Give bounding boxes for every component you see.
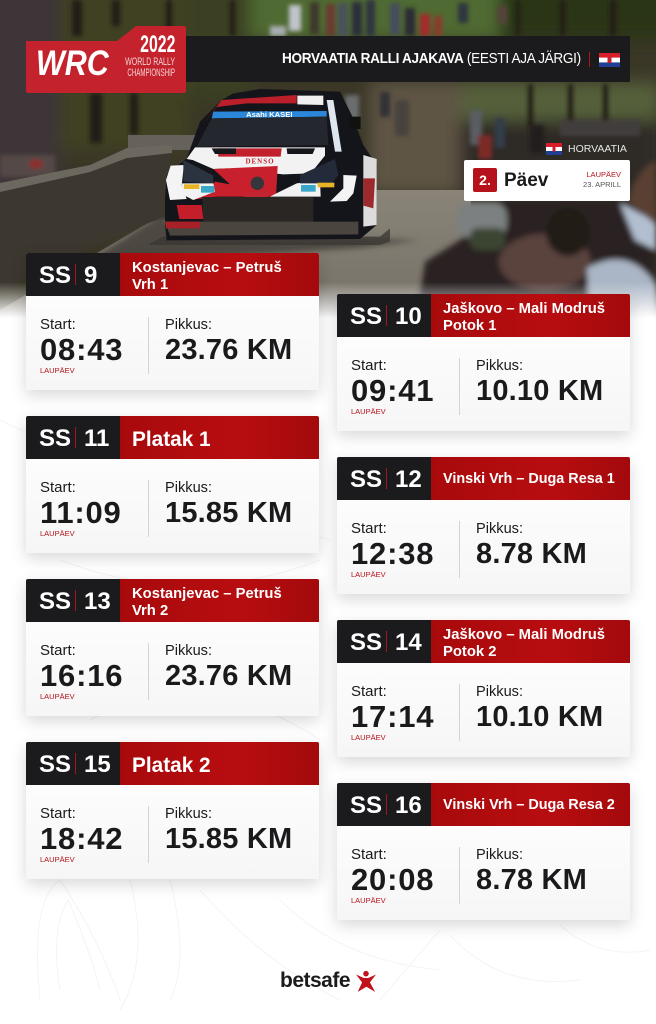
day label: Päev (504, 170, 548, 191)
length value: 10.10 KM (476, 375, 603, 407)
length value: 8.78 KM (476, 864, 587, 896)
separator (148, 317, 149, 374)
length label: Pikkus: (476, 521, 523, 537)
betsafe wordmark: betsafe (280, 969, 350, 992)
icon: betsafe figure (356, 970, 376, 992)
fade to white (0, 282, 656, 318)
day badge (464, 160, 630, 201)
divider (589, 52, 590, 67)
time value: 09:41 (351, 373, 434, 408)
stage name (120, 416, 319, 459)
day note: LAUPÄEV (40, 855, 75, 864)
length value: 15.85 KM (165, 497, 292, 529)
stage number: 16 (395, 792, 422, 819)
start time: Start: (351, 357, 387, 374)
stage number (337, 457, 431, 500)
stage name: Platak 1 (132, 428, 211, 451)
separator (459, 521, 460, 578)
stage name (431, 783, 630, 826)
country name: HORVAATIA (568, 143, 627, 155)
length label: Pikkus: (476, 358, 523, 374)
background photo: rally stage (0, 0, 656, 316)
stage name (120, 579, 319, 622)
start time: Start: (351, 846, 387, 863)
stage name: Vinski Vrh – Duga Resa 2 (443, 797, 615, 813)
stage number: SS (350, 466, 382, 493)
betsafe logo (280, 969, 376, 992)
card: SS 12 (337, 457, 630, 594)
day note: LAUPÄEV (40, 692, 75, 701)
length value: 15.85 KM (165, 823, 292, 855)
year: 2022 (140, 31, 175, 58)
stage name: Kostanjevac – Petruš (132, 586, 282, 602)
stage number (26, 253, 120, 296)
stage name (120, 253, 319, 296)
location label (546, 143, 627, 155)
icon: Croatian flag small (546, 143, 562, 155)
stage name (431, 620, 630, 663)
stage number: SS (350, 303, 382, 330)
day note: LAUPÄEV (351, 733, 386, 742)
stage number: SS (350, 629, 382, 656)
stage number: 12 (395, 466, 422, 493)
card: SS 15 (26, 742, 319, 879)
stage name: Vrh 2 (132, 603, 168, 619)
rally car: DENSO (245, 157, 275, 165)
day number (473, 168, 497, 192)
separator (459, 358, 460, 415)
date: LAUPÄEV (586, 170, 621, 179)
header title: HORVAATIA RALLI AJAKAVA (EESTI AJA JÄRGI) (282, 50, 581, 67)
stage number: SS (39, 588, 71, 615)
card: SS 11 (26, 416, 319, 553)
stage number (337, 294, 431, 337)
separator (148, 806, 149, 863)
start time: Start: (351, 683, 387, 700)
championship text: WORLD RALLY (125, 56, 175, 68)
rally car (150, 89, 390, 245)
stage number: SS (39, 751, 71, 778)
day note: LAUPÄEV (40, 529, 75, 538)
start time: Start: (40, 805, 76, 822)
start time: Start: (40, 479, 76, 496)
day note: LAUPÄEV (351, 407, 386, 416)
length label: Pikkus: (165, 480, 212, 496)
separator (148, 643, 149, 700)
card: SS 16 (337, 783, 630, 920)
separator (459, 847, 460, 904)
stone wall (0, 135, 197, 292)
stage number (337, 620, 431, 663)
WRC logo (26, 26, 186, 93)
rally car: Asahi KASEI (246, 110, 293, 119)
spectators (0, 0, 640, 177)
start time: Start: (40, 642, 76, 659)
length label: Pikkus: (165, 643, 212, 659)
stage number (26, 579, 120, 622)
stage name: Jaškovo – Mali Modruš (443, 301, 605, 317)
stage name (431, 294, 630, 337)
stage number: 15 (84, 751, 111, 778)
tree trunks (72, 0, 616, 143)
time value: 12:38 (351, 536, 434, 571)
separator (148, 480, 149, 537)
length value: 23.76 KM (165, 660, 292, 692)
stage number: SS (39, 425, 71, 452)
foreground photographers, blurred (415, 160, 656, 330)
date (583, 170, 621, 189)
day note: LAUPÄEV (351, 570, 386, 579)
stage number: 13 (84, 588, 111, 615)
stage number: 10 (395, 303, 422, 330)
length value: 23.76 KM (165, 334, 292, 366)
card: SS 13 (26, 579, 319, 716)
card: SS 14 (337, 620, 630, 757)
stage name (120, 742, 319, 785)
stage number: SS (39, 262, 71, 289)
WRC wordmark: WRC (36, 44, 109, 83)
length label: Pikkus: (165, 317, 212, 333)
stage number: 14 (395, 629, 422, 656)
stage number (26, 742, 120, 785)
date: 23. APRILL (583, 180, 621, 189)
championship text: CHAMPIONSHIP (127, 67, 175, 79)
stage name: Platak 2 (132, 754, 211, 777)
time value: 20:08 (351, 862, 434, 897)
topographic background lines (0, 420, 650, 1010)
time value: 11:09 (40, 495, 122, 530)
stage name (431, 457, 630, 500)
championship text (125, 56, 175, 79)
start time: Start: (351, 520, 387, 537)
stage name: Jaškovo – Mali Modruš (443, 627, 605, 643)
stage name: Potok 2 (443, 644, 496, 660)
separator (459, 684, 460, 741)
length value: 10.10 KM (476, 701, 603, 733)
stage number: 9 (84, 262, 97, 289)
stage number (337, 783, 431, 826)
stage number: 11 (84, 425, 109, 452)
stage number: SS (350, 792, 382, 819)
stage number (26, 416, 120, 459)
stage name: Vrh 1 (132, 277, 168, 293)
time value: 17:14 (351, 699, 434, 734)
day number: 2. (479, 172, 491, 188)
stage name: Kostanjevac – Petruš (132, 260, 282, 276)
length value: 8.78 KM (476, 538, 587, 570)
card: SS 10 (337, 294, 630, 431)
day note: LAUPÄEV (40, 366, 75, 375)
card: SS 9 (26, 253, 319, 390)
length label: Pikkus: (476, 847, 523, 863)
icon: Croatian flag (599, 53, 620, 67)
stage name: Vinski Vrh – Duga Resa 1 (443, 471, 615, 487)
day note: LAUPÄEV (351, 896, 386, 905)
road (0, 190, 480, 330)
time value: 08:43 (40, 332, 123, 367)
time value: 18:42 (40, 821, 123, 856)
length label: Pikkus: (476, 684, 523, 700)
stage name: Potok 1 (443, 318, 496, 334)
start time: Start: (40, 316, 76, 333)
length label: Pikkus: (165, 806, 212, 822)
header bar (185, 36, 630, 82)
time value: 16:16 (40, 658, 123, 693)
